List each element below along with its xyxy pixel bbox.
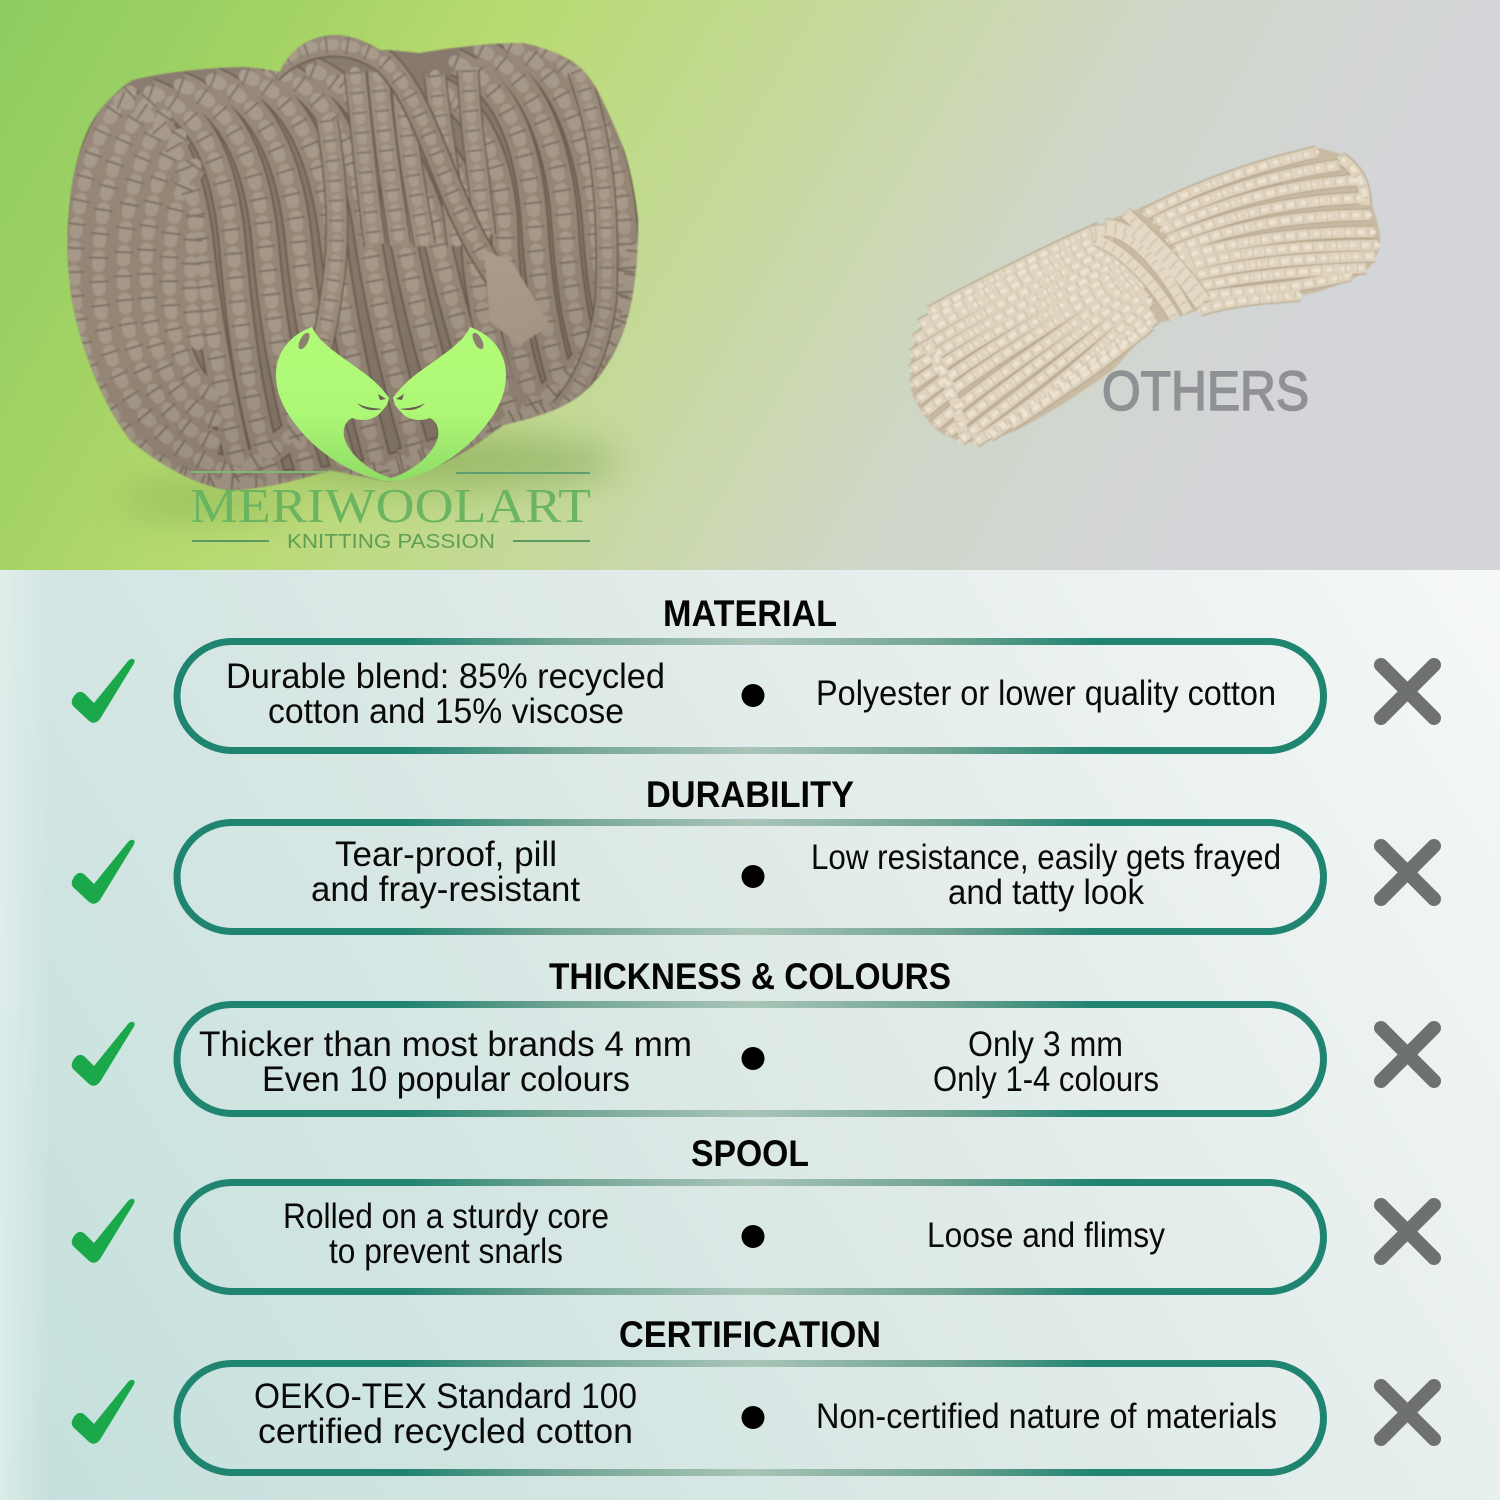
text: ours: Tear-proof, pill: [335, 835, 557, 874]
yarn shadow on floor: [120, 434, 620, 516]
bullet: [742, 684, 764, 707]
text: ours: cotton and 15% viscose: [268, 692, 624, 731]
pill: [177, 1004, 1324, 1114]
icon: cross: [1381, 846, 1434, 899]
logo wordmark: [190, 471, 591, 553]
icon: Meriwoolart fox-heart logo: [276, 327, 506, 481]
label: OTHERS: OTHERS: [1102, 359, 1309, 422]
icon: check: [72, 1022, 135, 1086]
pill: [177, 822, 1324, 932]
text: others: Only 1-4 colours: [933, 1060, 1159, 1099]
row: thickness and colours: [72, 956, 1434, 1114]
logo left fox: [276, 327, 391, 481]
text: ours: OEKO-TEX Standard 100: [254, 1377, 637, 1416]
row: material: [72, 593, 1434, 750]
text: ours: Even 10 popular colours: [262, 1060, 630, 1099]
icon: cross: [1381, 1028, 1434, 1081]
text: others: Loose and flimsy: [927, 1216, 1165, 1255]
text: ours: [311, 835, 580, 909]
logo wordmark: KNITTING PASSION: [287, 531, 495, 553]
text: others: and tatty look: [948, 873, 1144, 912]
bullet: [742, 1406, 764, 1429]
top background panel: [0, 0, 1500, 570]
row: durability: [72, 774, 1434, 932]
icon: check: [72, 659, 135, 723]
text: ours: [226, 657, 665, 731]
text: others: [933, 1025, 1159, 1099]
text: others: [811, 838, 1281, 912]
bullet: [742, 1047, 764, 1070]
heading: thickness and colours: THICKNESS & COLOURS: [549, 956, 951, 997]
text: ours: certified recycled cotton: [258, 1412, 633, 1451]
product: cream cotton rope bundle: [911, 148, 1380, 443]
icon: check: [72, 840, 135, 904]
product: brown macrame yarn spool: [60, 30, 650, 500]
text: ours: to prevent snarls: [329, 1232, 563, 1271]
logo wordmark: MERIWOOLART: [190, 478, 591, 533]
text: ours: Durable blend: 85% recycled: [226, 657, 665, 696]
row: spool: [72, 1133, 1434, 1292]
tassel: [484, 250, 550, 345]
heading: spool: SPOOL: [691, 1133, 809, 1174]
bottom comparison background panel: [0, 570, 1500, 1500]
text: ours: [283, 1197, 609, 1271]
text: ours: Rolled on a sturdy core: [283, 1197, 609, 1236]
bullet: [742, 1225, 764, 1248]
text: others: Low resistance, easily gets frayed: [811, 838, 1281, 877]
row: certification: [72, 1314, 1434, 1472]
heading: certification: CERTIFICATION: [619, 1314, 881, 1355]
icon: cross: [1381, 1386, 1434, 1439]
text: ours: [199, 1025, 692, 1099]
icon: check: [72, 1380, 135, 1444]
logo right fox: [391, 327, 506, 481]
icon: cross: [1381, 1205, 1434, 1258]
text: others: Only 3 mm: [968, 1025, 1123, 1064]
heading: durability: DURABILITY: [646, 774, 854, 815]
bullet: [742, 865, 764, 888]
text: others: Non-certified nature of materials: [816, 1397, 1277, 1436]
text: others: Polyester or lower quality cotton: [816, 674, 1276, 713]
icon: check: [72, 1199, 135, 1263]
text: ours: and fray-resistant: [311, 870, 580, 909]
text: ours: Thicker than most brands 4 mm: [199, 1025, 692, 1064]
text: ours: [254, 1377, 637, 1451]
pill: [177, 642, 1324, 750]
pill: [177, 1364, 1324, 1472]
heading: material: MATERIAL: [663, 593, 837, 634]
icon: cross: [1381, 665, 1434, 718]
pill: [177, 1182, 1324, 1292]
